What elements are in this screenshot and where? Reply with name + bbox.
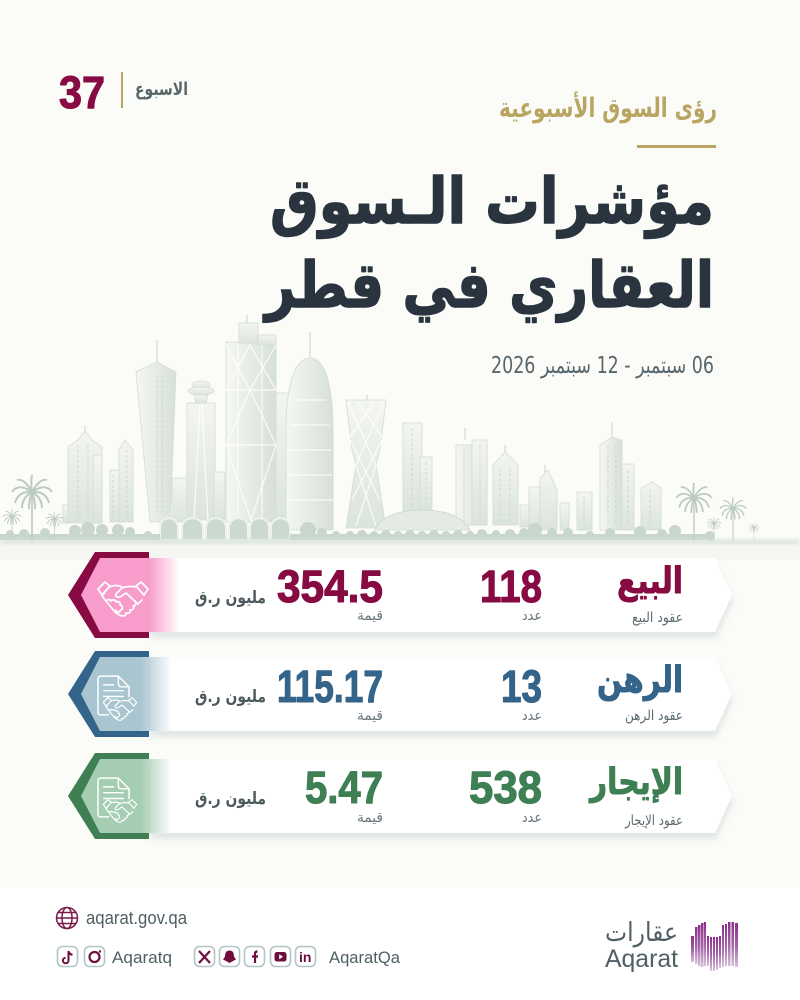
website text: aqarat.gov.qa bbox=[86, 908, 188, 928]
mortgage heading: الرهن bbox=[597, 660, 683, 701]
sale value: 354.5 bbox=[277, 561, 383, 612]
social handles bbox=[58, 946, 401, 967]
icon: contract and handshake bbox=[98, 778, 137, 822]
skyline illustration bbox=[0, 315, 800, 560]
sale unit: مليون ر.ق bbox=[195, 588, 266, 608]
icon: handshake bbox=[98, 582, 148, 616]
sale heading: البيع bbox=[617, 561, 683, 602]
sale count: 118 bbox=[480, 561, 542, 612]
logo mark bbox=[691, 922, 738, 971]
icon: linkedin bbox=[296, 946, 316, 966]
date range: 06 سبتمبر - 12 سبتمبر 2026 bbox=[491, 353, 714, 379]
mortgage subheading: عقود الرهن bbox=[625, 708, 683, 724]
icon: contract and handshake bbox=[98, 676, 137, 720]
sale count caption: عدد bbox=[522, 608, 542, 624]
panel: lease contracts bbox=[68, 753, 733, 839]
lease value caption: قيمة bbox=[357, 810, 383, 826]
week number: 37 bbox=[59, 67, 105, 118]
card shadow bbox=[150, 765, 733, 839]
main title bbox=[262, 165, 714, 322]
lease unit: مليون ر.ق bbox=[195, 789, 266, 809]
lease subheading: عقود الإيجار bbox=[624, 813, 683, 829]
handle: Aqaratq: Aqaratq bbox=[112, 948, 172, 967]
panel: sale contracts bbox=[68, 552, 733, 638]
mortgage count: 13 bbox=[501, 661, 542, 712]
main title: العقاري في قطر bbox=[262, 249, 714, 322]
mortgage value caption: قيمة bbox=[357, 708, 383, 724]
website link bbox=[56, 908, 188, 928]
main title: مؤشرات الـسوق bbox=[270, 165, 714, 239]
icon: tiktok bbox=[58, 946, 78, 966]
mortgage unit: مليون ر.ق bbox=[195, 687, 266, 707]
icon hexagon bbox=[68, 552, 180, 638]
logo Arabic wordmark: عقارات bbox=[605, 918, 678, 948]
week divider bbox=[121, 72, 123, 108]
icon hexagon bbox=[68, 651, 172, 737]
mortgage count caption: عدد bbox=[522, 708, 542, 724]
panel: mortgage contracts bbox=[68, 651, 733, 737]
icon: globe bbox=[56, 908, 78, 928]
logo Latin wordmark: Aqarat bbox=[605, 945, 678, 973]
card shadow bbox=[150, 663, 733, 737]
logo: Aqarat bbox=[605, 918, 738, 973]
sale value caption: قيمة bbox=[357, 608, 383, 624]
lease count caption: عدد bbox=[522, 810, 542, 826]
icon: instagram bbox=[84, 946, 104, 966]
week label: الاسبوع bbox=[135, 79, 188, 100]
card shadow bbox=[150, 564, 733, 638]
icon: facebook bbox=[244, 946, 264, 966]
lease heading: الإيجار bbox=[588, 762, 683, 803]
icon: X bbox=[194, 946, 214, 966]
sale subheading: عقود البيع bbox=[632, 610, 683, 626]
handle: AqaratQa: AqaratQa bbox=[329, 948, 401, 967]
eyebrow heading: رؤى السوق الأسبوعية bbox=[499, 91, 717, 124]
week badge bbox=[59, 67, 188, 118]
lease count: 538 bbox=[469, 762, 542, 813]
footer band bbox=[0, 888, 800, 1000]
lease value: 5.47 bbox=[305, 762, 383, 813]
icon: youtube bbox=[270, 946, 290, 966]
icon hexagon bbox=[68, 753, 172, 839]
gold rule bbox=[637, 145, 716, 148]
icon: linkedin: in bbox=[299, 949, 311, 965]
mortgage value: 115.17 bbox=[277, 661, 383, 712]
icon: snapchat bbox=[220, 946, 240, 966]
